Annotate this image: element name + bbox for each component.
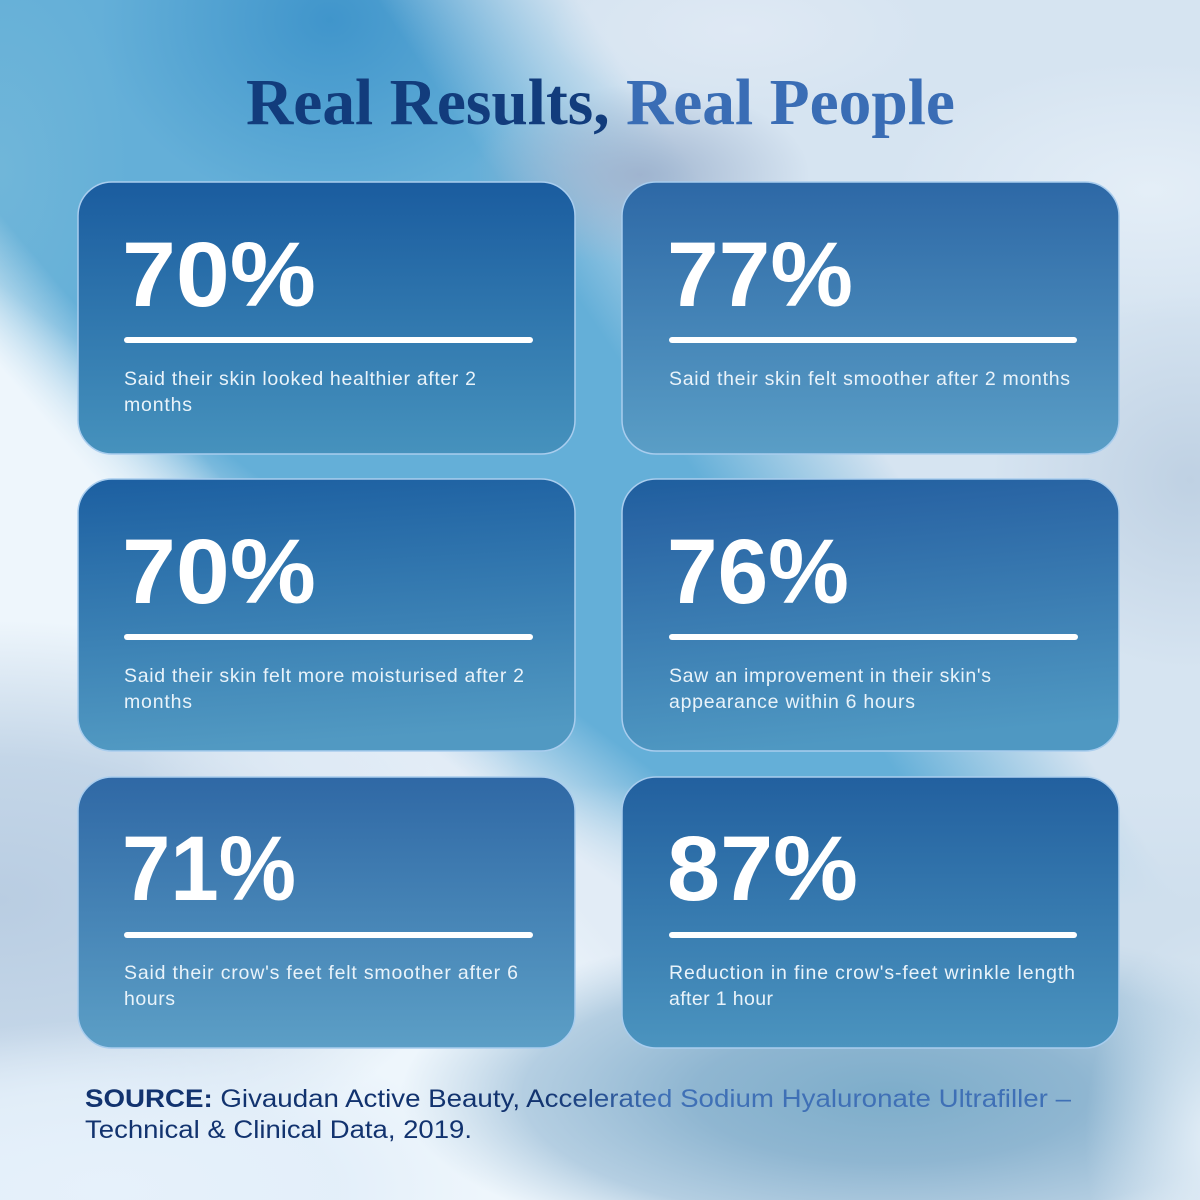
divider xyxy=(669,634,1078,640)
panel: 87% wrinkle length xyxy=(622,777,1119,1048)
description: Reduction in fine crow's-feet wrinkle length xyxy=(669,962,1075,984)
source note: SOURCE: Givaudan Active Beauty, Accelerated Sodium Hyaluronate Ultrafiller – xyxy=(85,1085,1071,1113)
divider xyxy=(124,337,533,343)
description: months xyxy=(124,394,192,416)
panel: 76% improvement xyxy=(622,479,1119,751)
panel: 70% moisturised xyxy=(78,479,575,751)
panel: 70% healthier xyxy=(78,182,575,454)
description: Said their crow's feet felt smoother after 6 xyxy=(124,962,518,984)
divider xyxy=(669,337,1077,343)
description: hours xyxy=(124,988,175,1010)
divider xyxy=(124,932,533,938)
description: appearance within 6 hours xyxy=(669,691,915,713)
stat: 87%: 87% xyxy=(667,818,858,920)
divider xyxy=(669,932,1077,938)
description: after 1 hour xyxy=(669,988,774,1010)
stat: 70%: 70% xyxy=(122,224,316,326)
description: Said their skin looked healthier after 2 xyxy=(124,368,476,390)
title: Real Results, Real People xyxy=(246,66,955,139)
stat: 76%: 76% xyxy=(667,521,849,623)
description: Said their skin felt smoother after 2 months xyxy=(669,368,1070,390)
description: Saw an improvement in their skin's xyxy=(669,665,991,687)
stat: 70%: 70% xyxy=(122,521,316,623)
panel: 77% smoother xyxy=(622,182,1119,454)
divider xyxy=(124,634,533,640)
source note xyxy=(85,1085,1071,1144)
stat: 71%: 71% xyxy=(122,818,296,920)
panel: 71% crow's feet xyxy=(78,777,575,1048)
source note: Technical & Clinical Data, 2019. xyxy=(85,1116,472,1144)
description: Said their skin felt more moisturised after 2 xyxy=(124,665,524,687)
stat: 77%: 77% xyxy=(667,224,853,326)
description: months xyxy=(124,691,192,713)
